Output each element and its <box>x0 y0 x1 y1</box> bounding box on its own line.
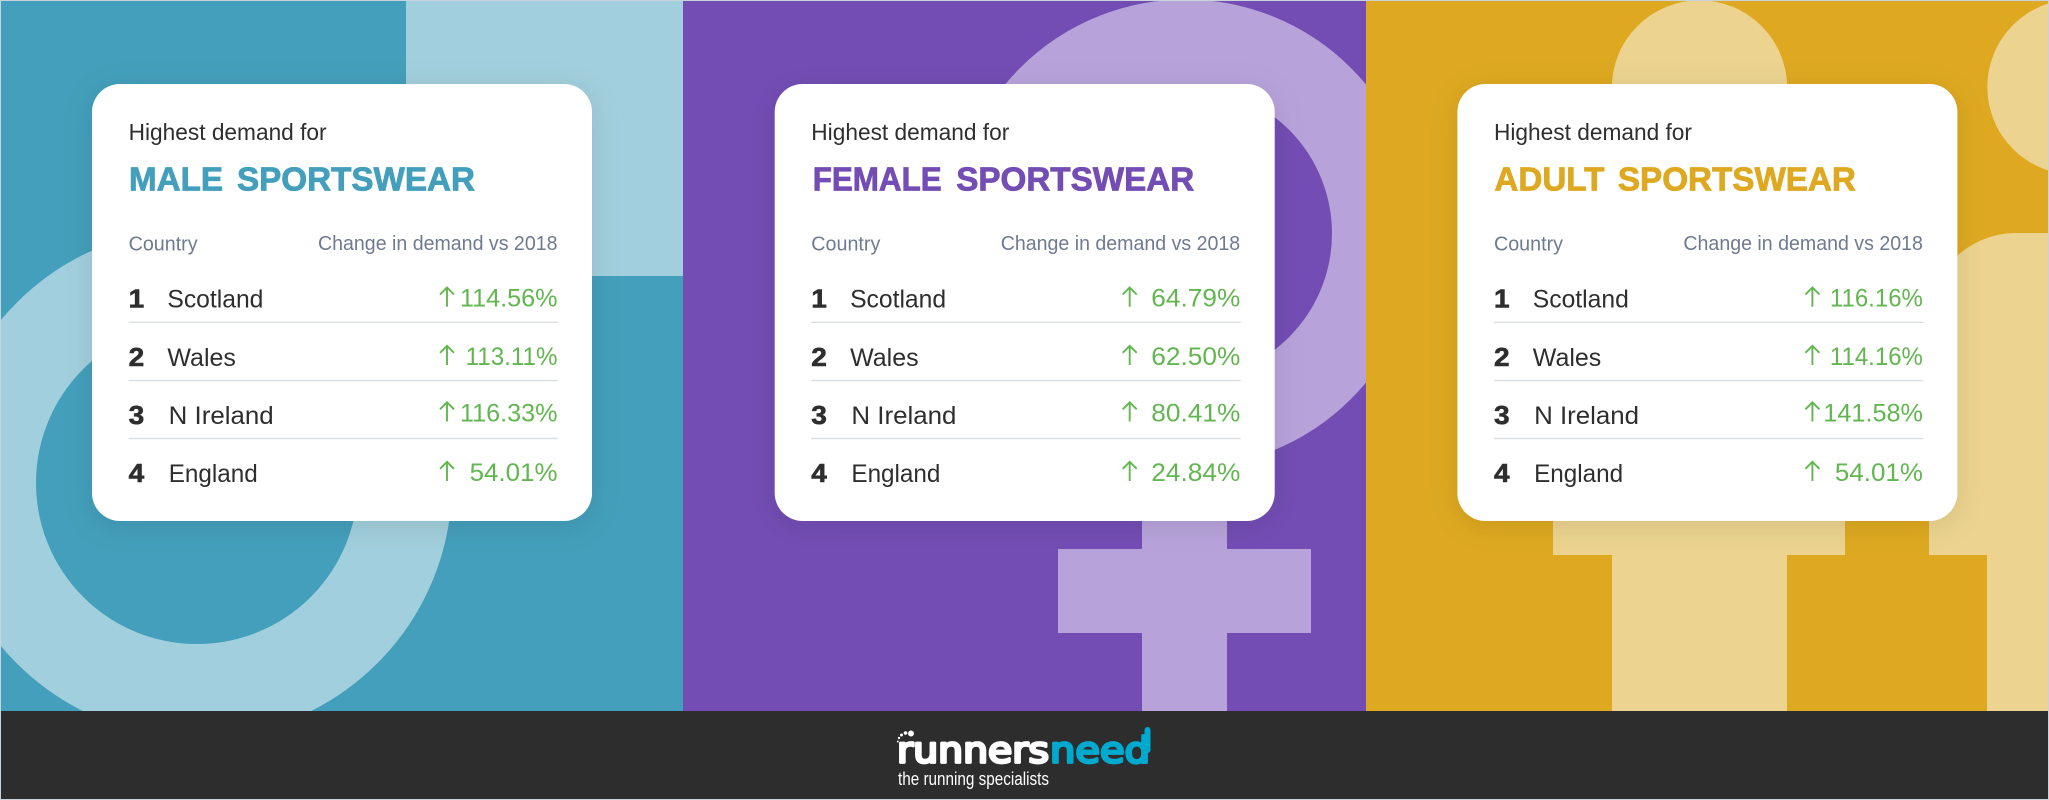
row: England: 54.01% <box>1835 459 1923 487</box>
logo wordmark: need: need <box>1050 730 1150 772</box>
row: Scotland: 116.16% <box>1830 285 1923 313</box>
row: N Ireland: N Ireland <box>169 402 274 430</box>
row: Wales: 114.16% <box>1830 343 1923 371</box>
row: Wales: Wales <box>850 344 919 372</box>
row: N Ireland <box>129 400 558 430</box>
heading <box>129 160 475 198</box>
row: England: England <box>851 460 940 488</box>
row: Wales: Wales <box>1533 344 1601 372</box>
intro text: Highest demand for <box>811 119 1010 145</box>
row: N Ireland: 3 <box>811 400 827 430</box>
logo: runnersneed <box>897 730 1150 789</box>
heading <box>1494 160 1856 198</box>
row: Wales <box>1494 342 1923 372</box>
female symbol: ring <box>995 43 1376 424</box>
row: Scotland: 1 <box>1494 284 1510 314</box>
row: N Ireland <box>1494 400 1923 430</box>
heading: SPORTSWEAR <box>1618 160 1856 198</box>
row: England <box>1494 458 1923 488</box>
row: N Ireland: 3 <box>1494 400 1510 430</box>
footer bar <box>0 711 2049 800</box>
row: Wales <box>811 342 1240 372</box>
row: Wales: 113.11% <box>466 343 558 371</box>
row: N Ireland: 141.58% <box>1823 400 1923 428</box>
card: female sportswear <box>775 84 1275 521</box>
column header: change: Change in demand vs 2018 <box>318 232 558 255</box>
heading <box>813 160 1194 198</box>
logo: footprint dots <box>897 730 914 742</box>
logo tagline: the running specialists <box>898 769 1049 789</box>
row: England <box>129 458 558 488</box>
panel: male background <box>0 0 683 711</box>
row: England: 24.84% <box>1151 459 1240 487</box>
heading: ADULT <box>1494 160 1604 198</box>
row: Wales <box>129 342 558 372</box>
panel: adult background <box>1366 0 2049 711</box>
adult figure: second person <box>1929 0 2049 711</box>
row: N Ireland: 3 <box>129 400 144 430</box>
intro text: Highest demand for <box>129 119 327 145</box>
heading: SPORTSWEAR <box>956 160 1194 198</box>
row: Scotland: 1 <box>129 284 144 314</box>
intro text: Highest demand for <box>1494 119 1692 145</box>
panel: female background <box>683 0 1376 711</box>
row: Scotland: 114.56% <box>460 285 558 313</box>
row: Scotland <box>811 284 1240 314</box>
card: male sportswear <box>92 84 592 521</box>
female symbol: cross <box>1058 521 1311 711</box>
heading: MALE <box>129 160 223 198</box>
column header: country: Country <box>811 232 881 256</box>
row: N Ireland: 116.33% <box>460 400 558 428</box>
row: N Ireland <box>811 400 1240 430</box>
row: Wales: Wales <box>167 344 236 372</box>
row: Scotland: Scotland <box>1533 286 1629 314</box>
row: Scotland: 1 <box>811 284 827 314</box>
row: N Ireland: N Ireland <box>1534 402 1639 430</box>
heading: FEMALE <box>813 160 942 198</box>
row: Wales: 2 <box>129 342 144 372</box>
row: N Ireland: N Ireland <box>851 402 956 430</box>
male symbol: ring <box>0 275 405 691</box>
row: England: 4 <box>129 458 145 488</box>
row: Scotland <box>129 284 558 314</box>
column header: change: Change in demand vs 2018 <box>1001 232 1240 255</box>
column header: country: Country <box>129 232 198 256</box>
row: Scotland <box>1494 284 1923 314</box>
row: England: 54.01% <box>470 459 558 487</box>
row: Scotland: Scotland <box>167 286 263 314</box>
row: Wales: 2 <box>811 342 827 372</box>
adult figure: first person <box>1553 0 1845 711</box>
logo: stem of d <box>1144 730 1150 750</box>
column header: country: Country <box>1494 232 1564 256</box>
row: Scotland: 64.79% <box>1151 285 1240 313</box>
row: England: England <box>169 460 258 488</box>
row: N Ireland: 80.41% <box>1151 400 1240 428</box>
row: England: 4 <box>811 458 827 488</box>
row: England: England <box>1534 460 1623 488</box>
row: England: 4 <box>1494 458 1510 488</box>
column header: change: Change in demand vs 2018 <box>1683 232 1923 255</box>
row: England <box>811 458 1240 488</box>
logo wordmark: runners: runners <box>897 730 1049 772</box>
row: Wales: 62.50% <box>1151 343 1240 371</box>
row: Wales: 2 <box>1494 342 1510 372</box>
card: adult sportswear <box>1457 84 1957 521</box>
male symbol: arrow square <box>406 0 683 276</box>
row: Scotland: Scotland <box>850 286 946 314</box>
heading: SPORTSWEAR <box>237 160 475 198</box>
